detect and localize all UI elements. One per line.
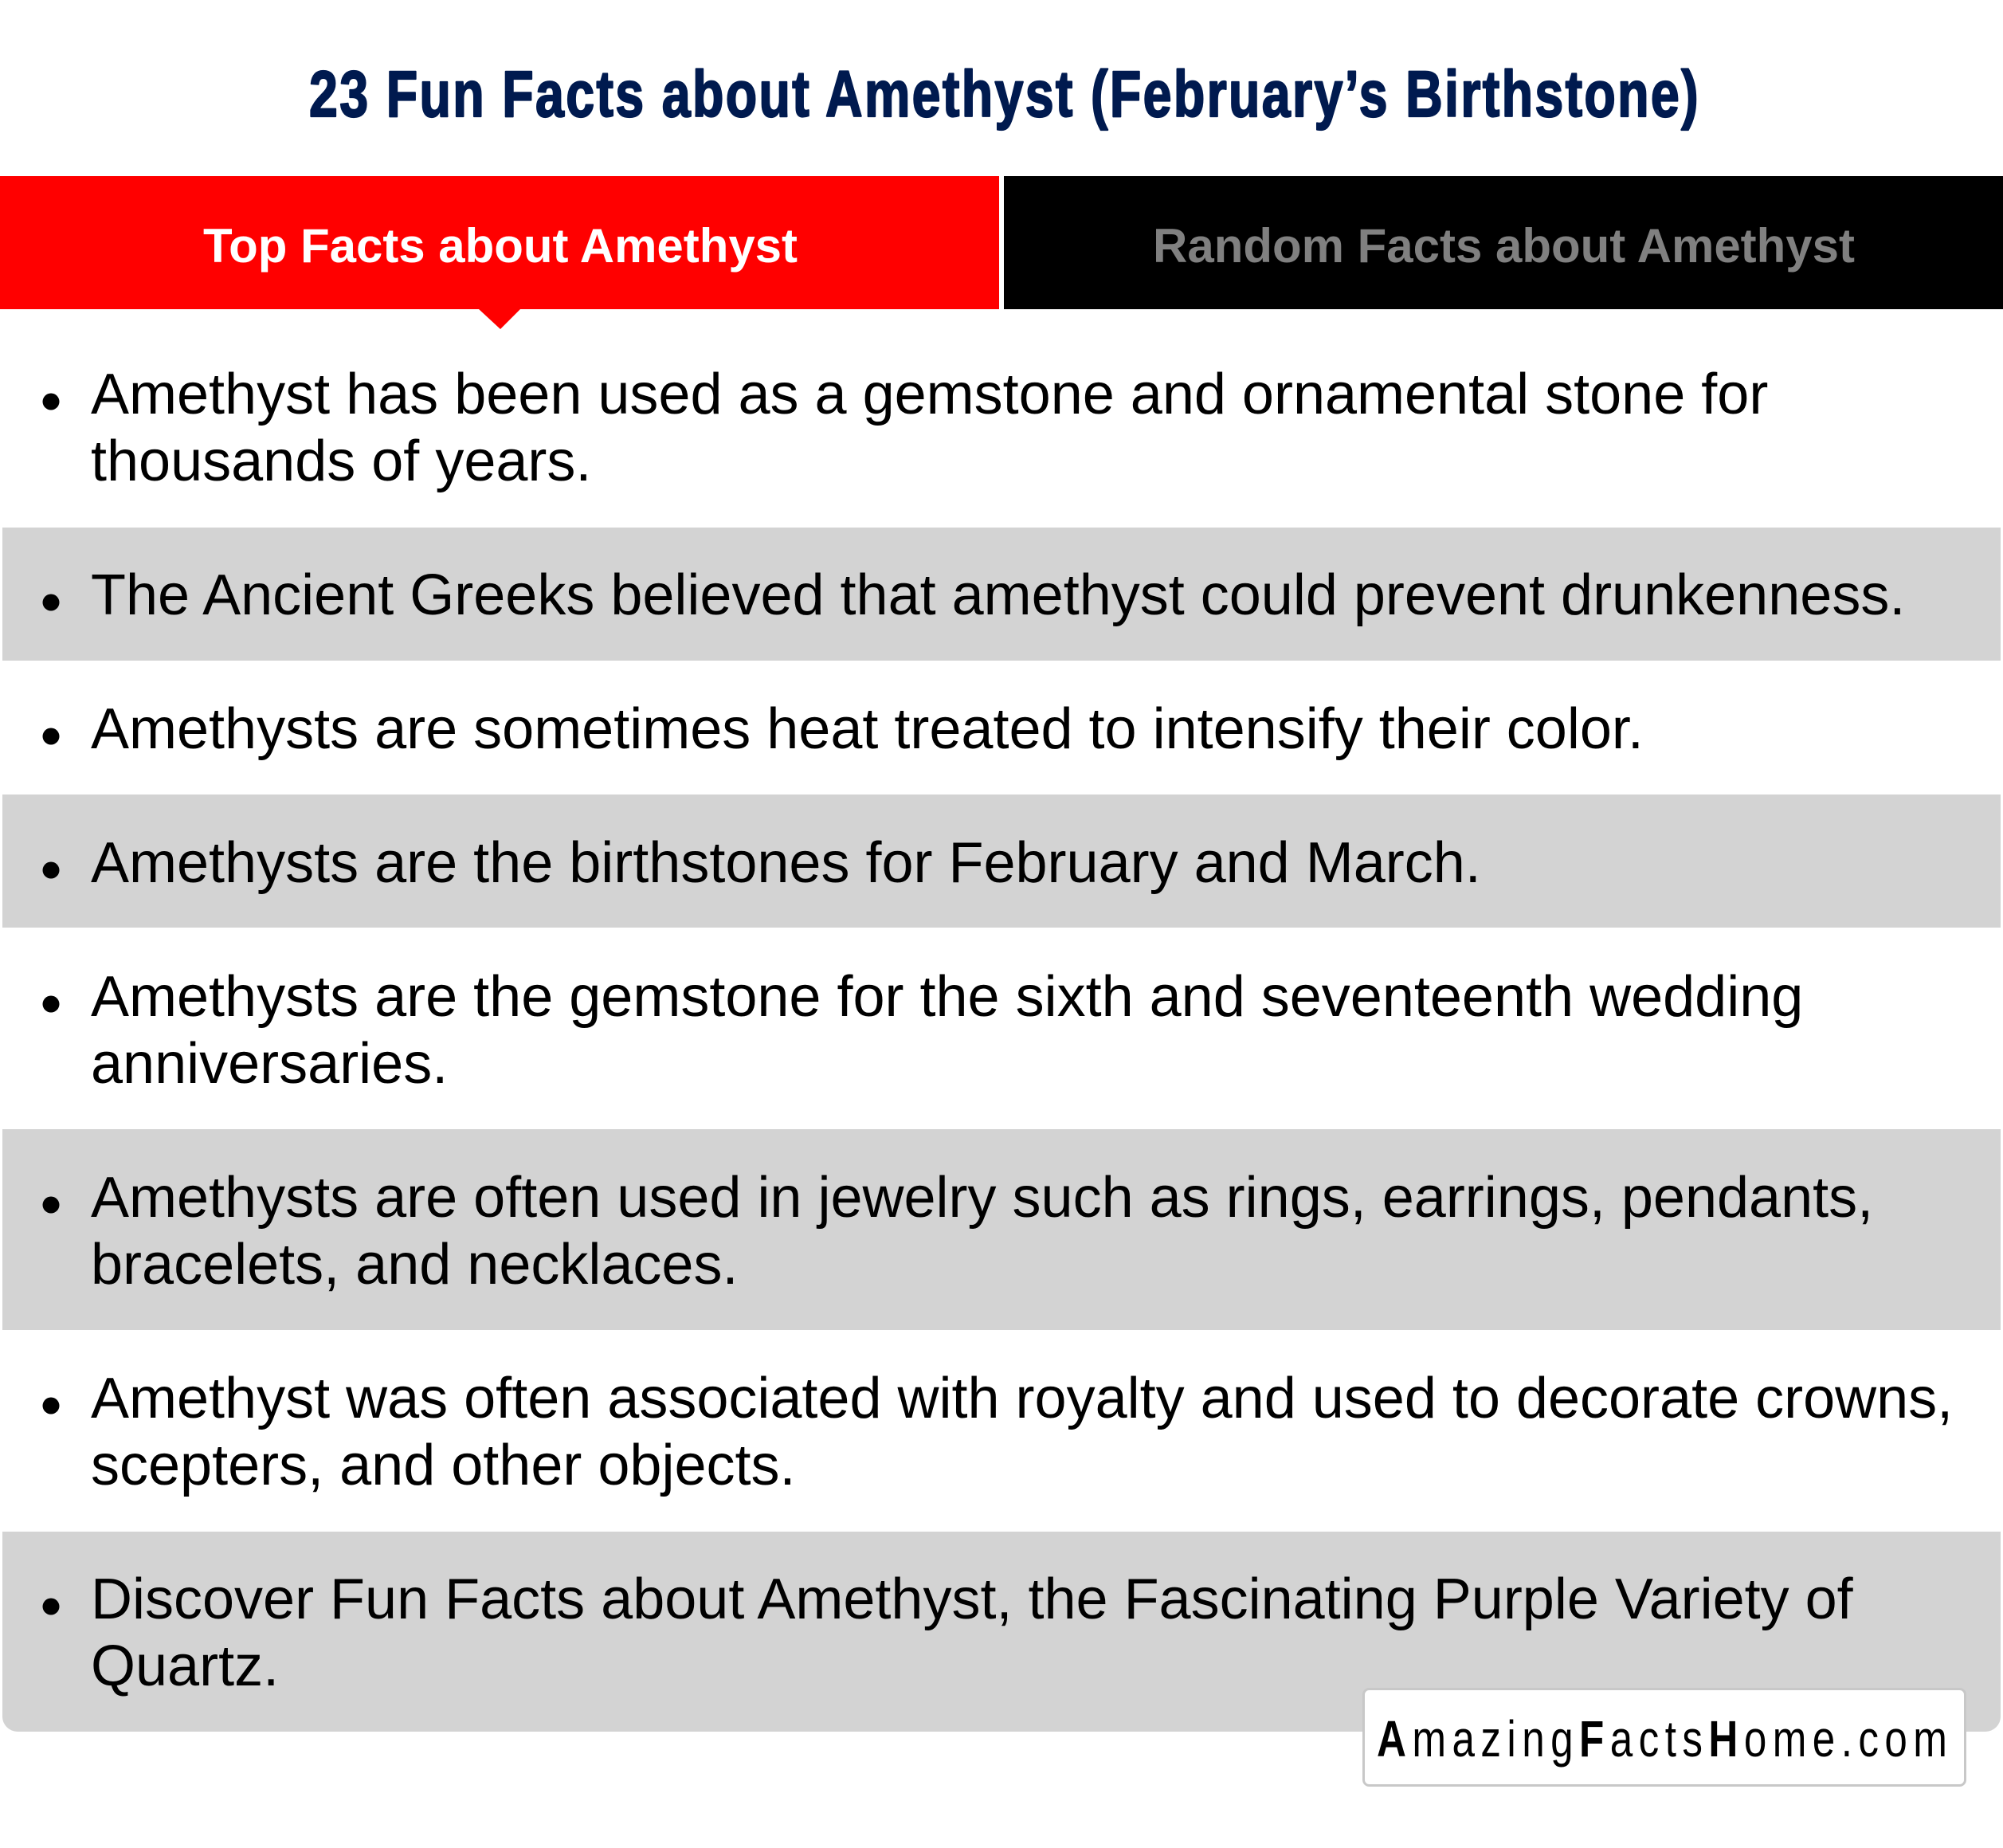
fact 8 row [2,1532,2001,1732]
fact 8 row: Discover Fun Facts about Amethyst, the Fascinating Purple Variety of [91,1567,1854,1631]
tab: top facts (active): Top Facts about Amethyst [203,219,798,273]
fact 1: thousands of years. [91,430,591,493]
tab: random facts: Random Facts about Amethyst [1153,219,1855,273]
fact 4 row: Amethysts are the birthstones for February and March. [91,831,1481,895]
fact 2 row: The Ancient Greeks believed that amethyst could prevent drunkenness. [91,563,1905,627]
fact 6 row: bracelets, and necklaces. [91,1233,738,1297]
fact 5: Amethysts are the gemstone for the sixth and seventeenth wedding [91,965,1803,1029]
fact 8 row: Quartz. [91,1634,279,1698]
tab: top facts (active) [0,176,999,329]
tab: random facts [1004,176,2003,309]
fact 7: Amethyst was often associated with royalty and used to decorate crowns, [91,1367,1953,1430]
watermark badge [1364,1689,1965,1785]
fact 7: scepters, and other objects. [91,1434,795,1497]
fact 1 [43,363,1768,493]
fact 1: Amethyst has been used as a gemstone and ornamental stone for [91,363,1768,426]
fact 2 row [2,528,2001,661]
fact 5 [43,965,1803,1096]
watermark badge: AmazingFactsHome.com [1377,1712,1953,1768]
fact 6 row: Amethysts are often used in jewelry such as rings, earrings, pendants, [91,1166,1873,1230]
fact 6 row [2,1129,2001,1330]
fact 3: Amethysts are sometimes heat treated to intensify their color. [91,697,1644,761]
fact 4 row [2,795,2001,928]
fact 7 [43,1367,1953,1497]
fact 5: anniversaries. [91,1032,448,1096]
